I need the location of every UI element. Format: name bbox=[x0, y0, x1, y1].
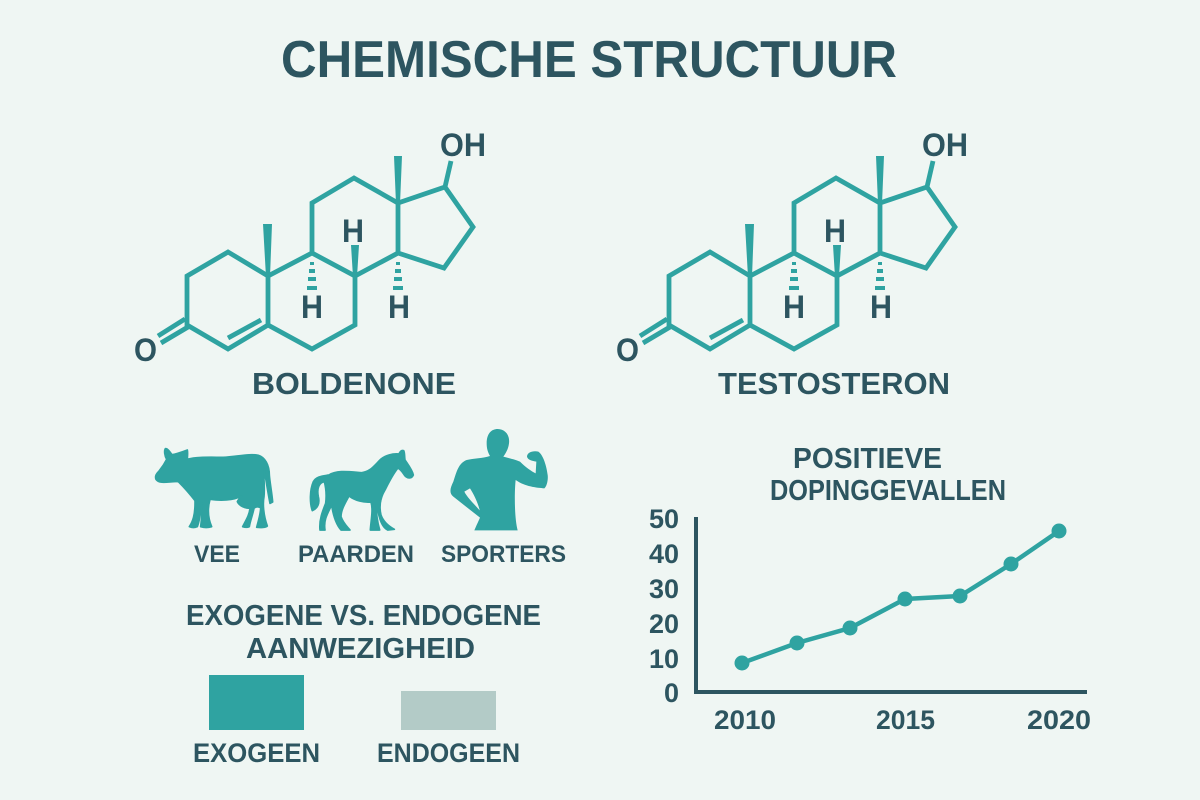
heading: exogene vs endogene: EXOGENE VS. ENDOGENE bbox=[186, 600, 541, 632]
testosteron atom labels: H bbox=[824, 213, 846, 249]
data line bbox=[742, 531, 1059, 663]
label: sporters: SPORTERS bbox=[441, 541, 566, 568]
icon: cow bbox=[156, 449, 273, 528]
label: exogeen: EXOGEEN bbox=[193, 738, 320, 768]
panel: boldenone molecule bbox=[134, 127, 486, 368]
y axis labels: 50 bbox=[649, 504, 679, 534]
x axis labels bbox=[714, 705, 1091, 735]
testosteron atom labels: OH bbox=[922, 127, 968, 163]
legend bar: exogeen bbox=[209, 675, 304, 730]
x axis labels: 2020 bbox=[1027, 705, 1091, 735]
line chart bbox=[649, 504, 1091, 735]
boldenone atom labels bbox=[134, 127, 486, 368]
boldenone atom labels: H bbox=[342, 213, 364, 249]
label: boldenone: BOLDENONE bbox=[252, 366, 456, 401]
testosteron atom labels bbox=[616, 127, 968, 368]
testosteron atom labels: H bbox=[870, 289, 892, 325]
label: testosteron: TESTOSTERON bbox=[718, 366, 950, 401]
boldenone atom labels: OH bbox=[440, 127, 486, 163]
athlete arm gap bbox=[464, 488, 480, 510]
testosteron atom labels: H bbox=[783, 289, 805, 325]
testosteron wedge and hash bonds bbox=[745, 156, 885, 290]
label: endogeen: ENDOGEEN bbox=[377, 738, 520, 768]
chart heading: POSITIEVE bbox=[793, 443, 942, 475]
y axis labels: 0 bbox=[664, 678, 679, 708]
y axis labels: 20 bbox=[649, 609, 679, 639]
boldenone atom labels: O bbox=[134, 332, 157, 368]
panel: testosteron molecule bbox=[616, 127, 968, 368]
heading: exogene vs endogene bbox=[186, 600, 541, 665]
boldenone wedge and hash bonds bbox=[263, 156, 403, 290]
chart heading bbox=[770, 443, 1006, 507]
boldenone atom labels: H bbox=[388, 289, 410, 325]
y axis labels: 30 bbox=[649, 574, 679, 604]
chart axes bbox=[696, 517, 1087, 692]
x axis labels: 2010 bbox=[714, 705, 776, 735]
boldenone skeleton bonds bbox=[158, 161, 473, 349]
testosteron atom labels: O bbox=[616, 332, 639, 368]
legend bar: endogeen bbox=[401, 691, 496, 730]
label: paarden: PAARDEN bbox=[298, 541, 414, 568]
icon: athlete bbox=[450, 429, 548, 530]
y axis labels: 10 bbox=[649, 644, 679, 674]
y axis labels bbox=[649, 504, 679, 708]
data points bbox=[734, 524, 1066, 670]
testosteron skeleton bonds bbox=[640, 161, 955, 349]
title: CHEMISCHE STRUCTUUR bbox=[281, 31, 897, 89]
x axis labels: 2015 bbox=[876, 705, 935, 735]
boldenone atom labels: H bbox=[301, 289, 323, 325]
y axis labels: 40 bbox=[649, 539, 679, 569]
label: vee: VEE bbox=[194, 541, 240, 568]
heading: exogene vs endogene: AANWEZIGHEID bbox=[246, 633, 475, 665]
icon: horse bbox=[310, 451, 413, 530]
chart heading: DOPINGGEVALLEN bbox=[770, 475, 1006, 507]
